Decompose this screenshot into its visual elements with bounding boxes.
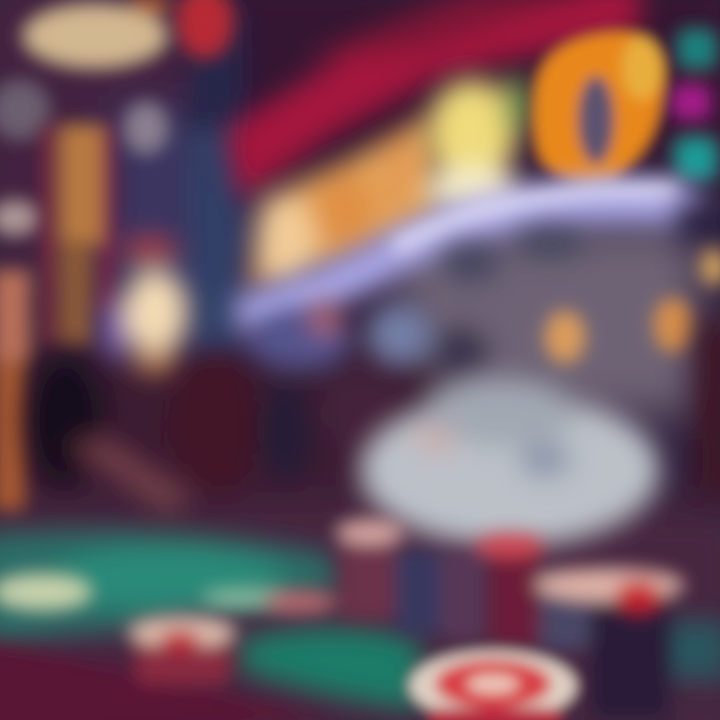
table white card glows (0, 574, 289, 610)
front red and white chip (409, 650, 577, 720)
chip stacks (264, 520, 684, 720)
peach and orange sign glow (250, 115, 440, 290)
large pale sphere (360, 378, 660, 546)
right dark edge (675, 205, 720, 500)
yellow-green sign glow (424, 75, 530, 214)
left gray panels (0, 80, 168, 235)
green gaming table (0, 530, 720, 710)
orange zero sign (533, 32, 665, 181)
bottom-left maroon table edge (0, 640, 330, 720)
dark upper column (190, 10, 245, 350)
neon squares column (672, 30, 717, 180)
seated silhouettes (27, 354, 400, 515)
white glow lamp (103, 236, 187, 374)
top-left ceiling lamp (23, 0, 233, 68)
crimson ceiling swath (226, 0, 640, 200)
bright arc highlight (400, 190, 670, 245)
lavender white arc (255, 202, 680, 312)
small left chip stack (128, 617, 236, 685)
left orange pillar (0, 125, 114, 510)
warm wall lights (545, 246, 720, 363)
people under arc (248, 226, 584, 374)
